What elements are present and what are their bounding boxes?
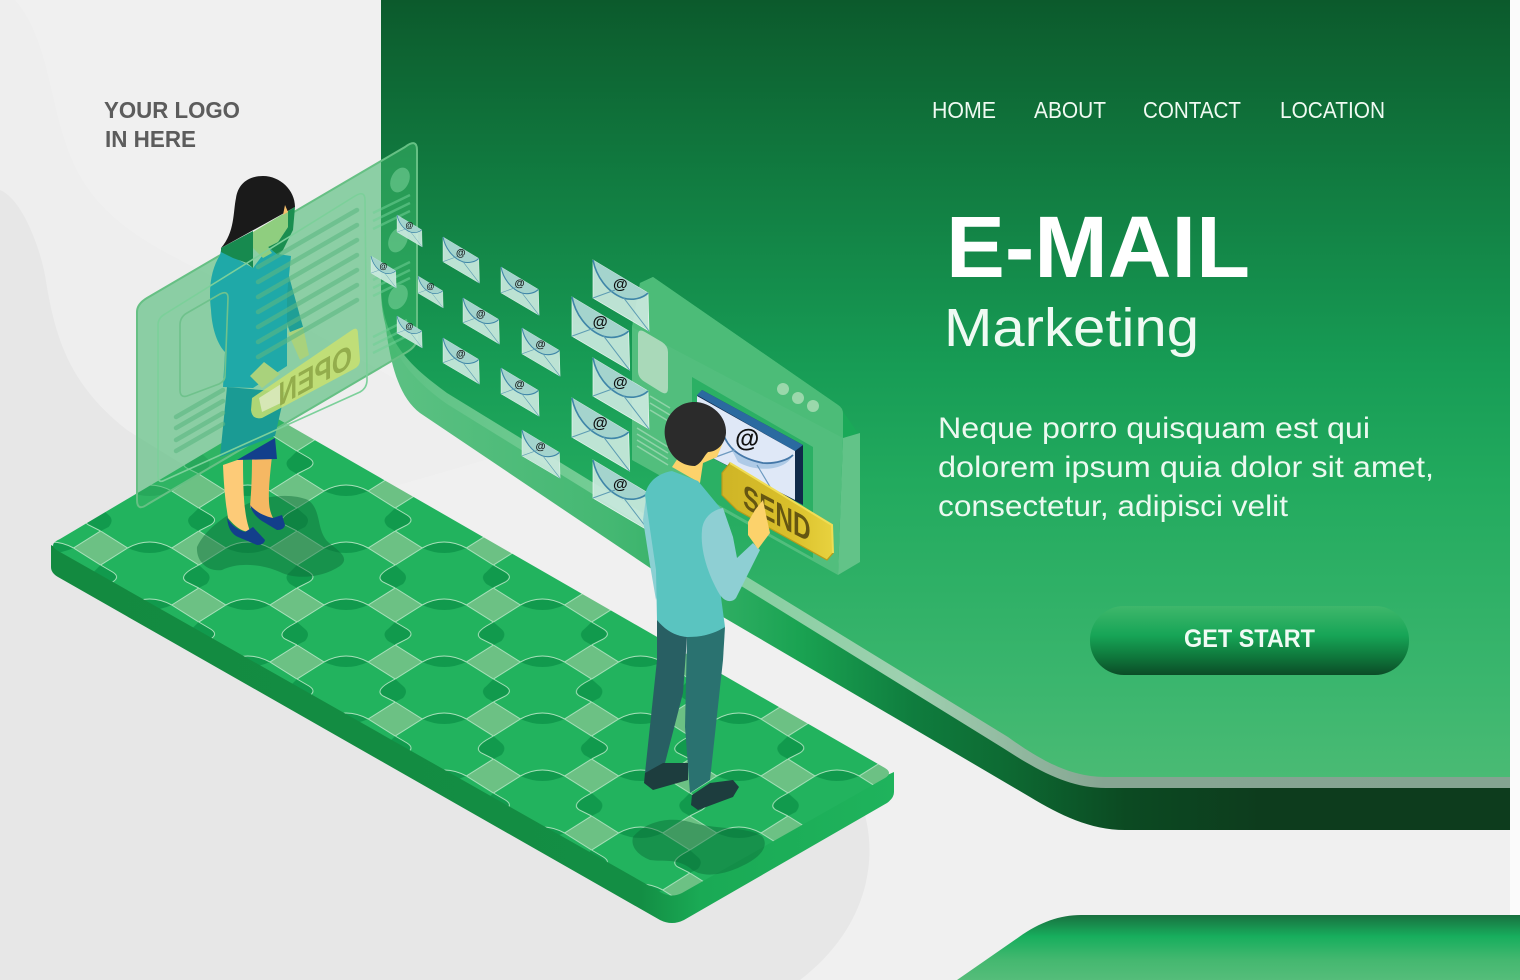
- emails flying between screens: @: [593, 415, 608, 432]
- glass panel details: [158, 164, 414, 481]
- arm: [278, 262, 303, 332]
- neck and face: [672, 440, 724, 483]
- emails flying between screens: @: [593, 314, 608, 331]
- lower hair seen through glass: [221, 231, 253, 268]
- panel: green hero with 3D edge: [381, 0, 1510, 830]
- front arm: [702, 508, 760, 601]
- emails flying between screens: @: [536, 340, 546, 351]
- screen: [697, 390, 803, 505]
- isometric floor platform: [51, 417, 894, 923]
- navigation: HOME: [932, 97, 996, 123]
- back arm: [643, 490, 665, 600]
- button: send: [722, 463, 833, 560]
- hair: [221, 176, 295, 248]
- emails flying between screens: @: [476, 309, 486, 320]
- title: [944, 199, 1250, 358]
- button: send: SEND: [743, 476, 811, 550]
- shadow: man: [632, 820, 765, 875]
- description text: Neque porro quisquam est qui: [938, 412, 1370, 445]
- emails over the glass panel: [371, 215, 422, 348]
- glass panel: inbox: [137, 143, 417, 507]
- shoes: [644, 763, 688, 790]
- navigation: CONTACT: [1143, 97, 1241, 123]
- description text: consectetur, adipisci velit: [938, 490, 1289, 523]
- skirt: [220, 387, 285, 457]
- sweater: [210, 248, 291, 388]
- description text: [938, 412, 1434, 523]
- logo text: [104, 97, 240, 152]
- emails flying between screens: @: [613, 476, 628, 493]
- emails flying between screens: @: [456, 349, 466, 360]
- emails flying between screens: @: [536, 442, 546, 453]
- title: Marketing: [944, 298, 1199, 358]
- emails flying between screens: @: [427, 282, 435, 291]
- woman: [210, 176, 309, 545]
- shoes: [227, 518, 265, 545]
- torso: [645, 471, 725, 637]
- screen: @: [735, 425, 759, 453]
- emails flying between screens: @: [613, 374, 628, 391]
- legs: [223, 458, 250, 531]
- navigation: [932, 97, 1385, 123]
- navigation: ABOUT: [1034, 97, 1106, 123]
- button: get start: [1090, 606, 1409, 675]
- title: E-MAIL: [946, 199, 1250, 296]
- man: [643, 402, 770, 810]
- hand: [748, 500, 770, 549]
- button: get start: GET START: [1184, 625, 1315, 653]
- head: [665, 402, 726, 466]
- logo text: YOUR LOGO: [104, 97, 240, 123]
- description text: dolorem ipsum quia dolor sit amet,: [938, 451, 1434, 484]
- button: open (mirrored): OPEN: [278, 337, 352, 414]
- button: open (mirrored): [251, 329, 360, 418]
- browser window: [632, 277, 860, 575]
- emails flying between screens: [418, 237, 649, 531]
- bottom green band: [957, 915, 1520, 980]
- emails flying between screens: @: [613, 276, 628, 293]
- emails over the glass panel: @: [406, 221, 414, 230]
- shadow: woman: [197, 496, 344, 577]
- emails flying between screens: @: [456, 248, 466, 259]
- emails over the glass panel: @: [406, 322, 414, 331]
- emails flying between screens: @: [515, 279, 525, 290]
- emails flying between screens: @: [515, 380, 525, 391]
- logo text: IN HERE: [105, 126, 196, 152]
- face: [253, 211, 288, 258]
- emails over the glass panel: @: [380, 262, 388, 271]
- navigation: LOCATION: [1280, 97, 1385, 123]
- trousers: [645, 620, 687, 773]
